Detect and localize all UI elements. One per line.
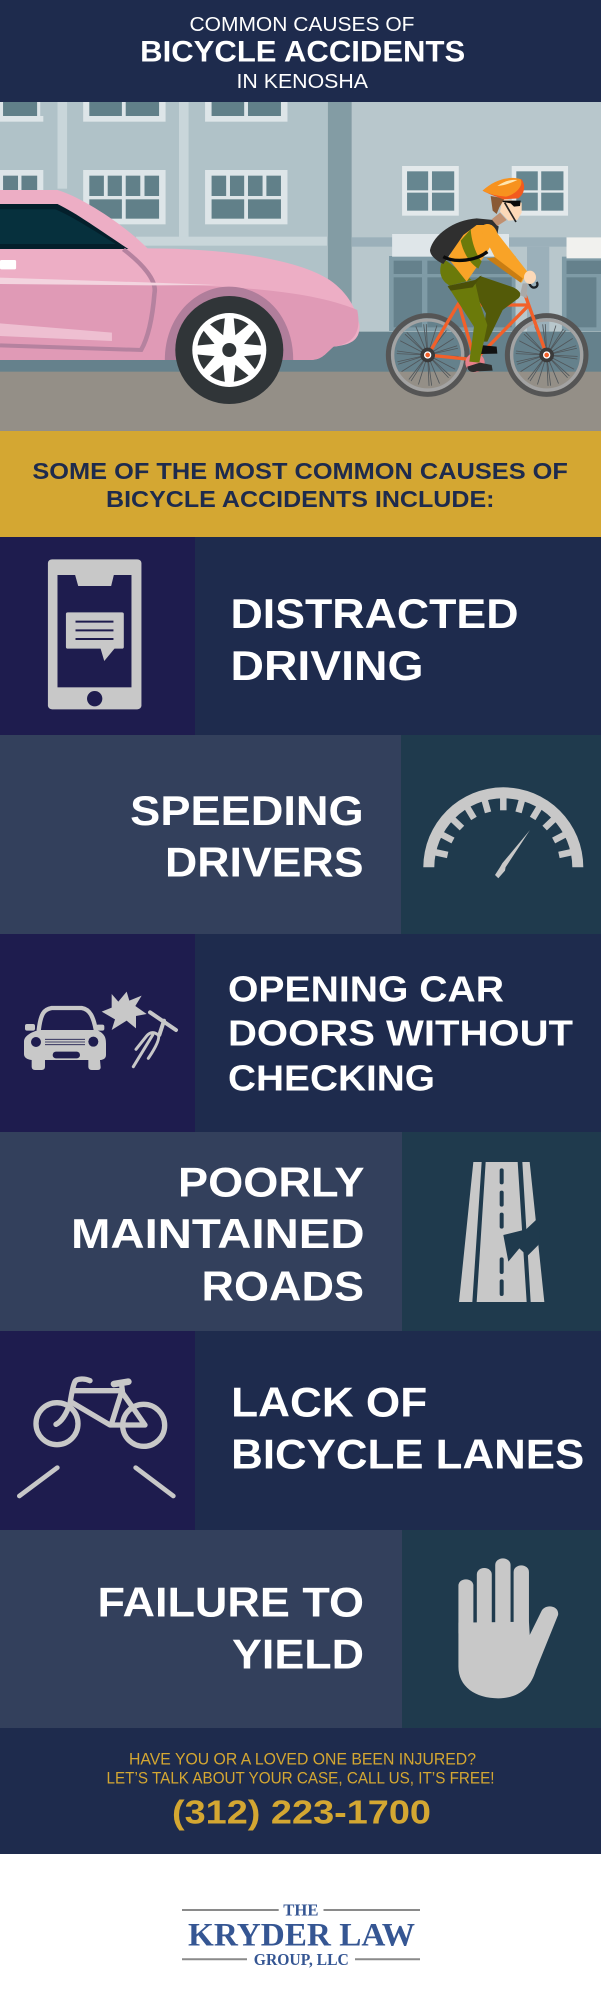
panel: poorly maintained roads — [0, 1132, 601, 1331]
header banner: IN KENOSHA — [236, 71, 369, 93]
panel: failure to yield — [0, 1530, 601, 1728]
gold intro banner — [0, 431, 601, 537]
panel: distracted driving: DRIVING — [230, 642, 424, 689]
hero illustration: street scene — [0, 102, 601, 431]
icon: damaged road — [459, 1162, 544, 1302]
panel: speeding drivers: SPEEDING — [130, 787, 364, 834]
panel: lack of bicycle lanes — [0, 1331, 601, 1530]
panel: opening car doors: DOORS WITHOUT — [228, 1013, 573, 1054]
panel: poorly maintained roads: ROADS — [202, 1263, 364, 1310]
icon: speedometer — [423, 787, 583, 878]
panel: speeding drivers — [0, 735, 601, 934]
gold intro banner: SOME OF THE MOST COMMON CAUSES OF — [32, 458, 568, 484]
pink car — [0, 190, 360, 360]
car wheel — [175, 296, 283, 404]
logo: The Kryder Law Group, LLC: GROUP, LLC — [254, 1950, 349, 1969]
logo: The Kryder Law Group, LLC — [182, 1901, 420, 1969]
panel: opening car doors: OPENING CAR — [228, 969, 504, 1010]
footer call to action: LET’S TALK ABOUT YOUR CASE, CALL US, IT’S FREE! — [106, 1769, 494, 1787]
panel: distracted driving: DISTRACTED — [230, 590, 518, 637]
icon: smartphone with message — [48, 559, 141, 709]
panel: speeding drivers: DRIVERS — [165, 839, 364, 886]
panel: lack of bicycle lanes: LACK OF — [231, 1379, 427, 1426]
footer call to action: (312) 223-1700 — [172, 1794, 431, 1831]
logo: The Kryder Law Group, LLC: KRYDER LAW — [188, 1918, 415, 1954]
icon: bicycle between lane lines — [19, 1379, 173, 1496]
cyclist on orange bicycle — [388, 178, 586, 394]
gold intro banner: BICYCLE ACCIDENTS INCLUDE: — [106, 486, 494, 512]
building backdrop — [0, 102, 601, 431]
header banner: BICYCLE ACCIDENTS — [140, 36, 465, 69]
footer call to action: HAVE YOU OR A LOVED ONE BEEN INJURED? — [129, 1750, 476, 1768]
panel: failure to yield: YIELD — [232, 1630, 364, 1677]
panel: opening car doors — [0, 934, 601, 1132]
panel: lack of bicycle lanes: BICYCLE LANES — [231, 1430, 584, 1477]
logo: The Kryder Law Group, LLC: THE — [283, 1901, 318, 1920]
panel: poorly maintained roads: MAINTAINED — [71, 1210, 364, 1257]
footer call to action — [0, 1728, 601, 1854]
icon: car and bicycle collision — [24, 992, 176, 1070]
icon: raised hand — [458, 1558, 558, 1698]
panel: distracted driving — [0, 537, 601, 735]
panel: opening car doors: CHECKING — [228, 1058, 435, 1099]
panel: failure to yield: FAILURE TO — [98, 1579, 364, 1626]
header banner: COMMON CAUSES OF — [190, 14, 414, 36]
header banner — [0, 0, 601, 102]
panel: poorly maintained roads: POORLY — [178, 1159, 364, 1206]
